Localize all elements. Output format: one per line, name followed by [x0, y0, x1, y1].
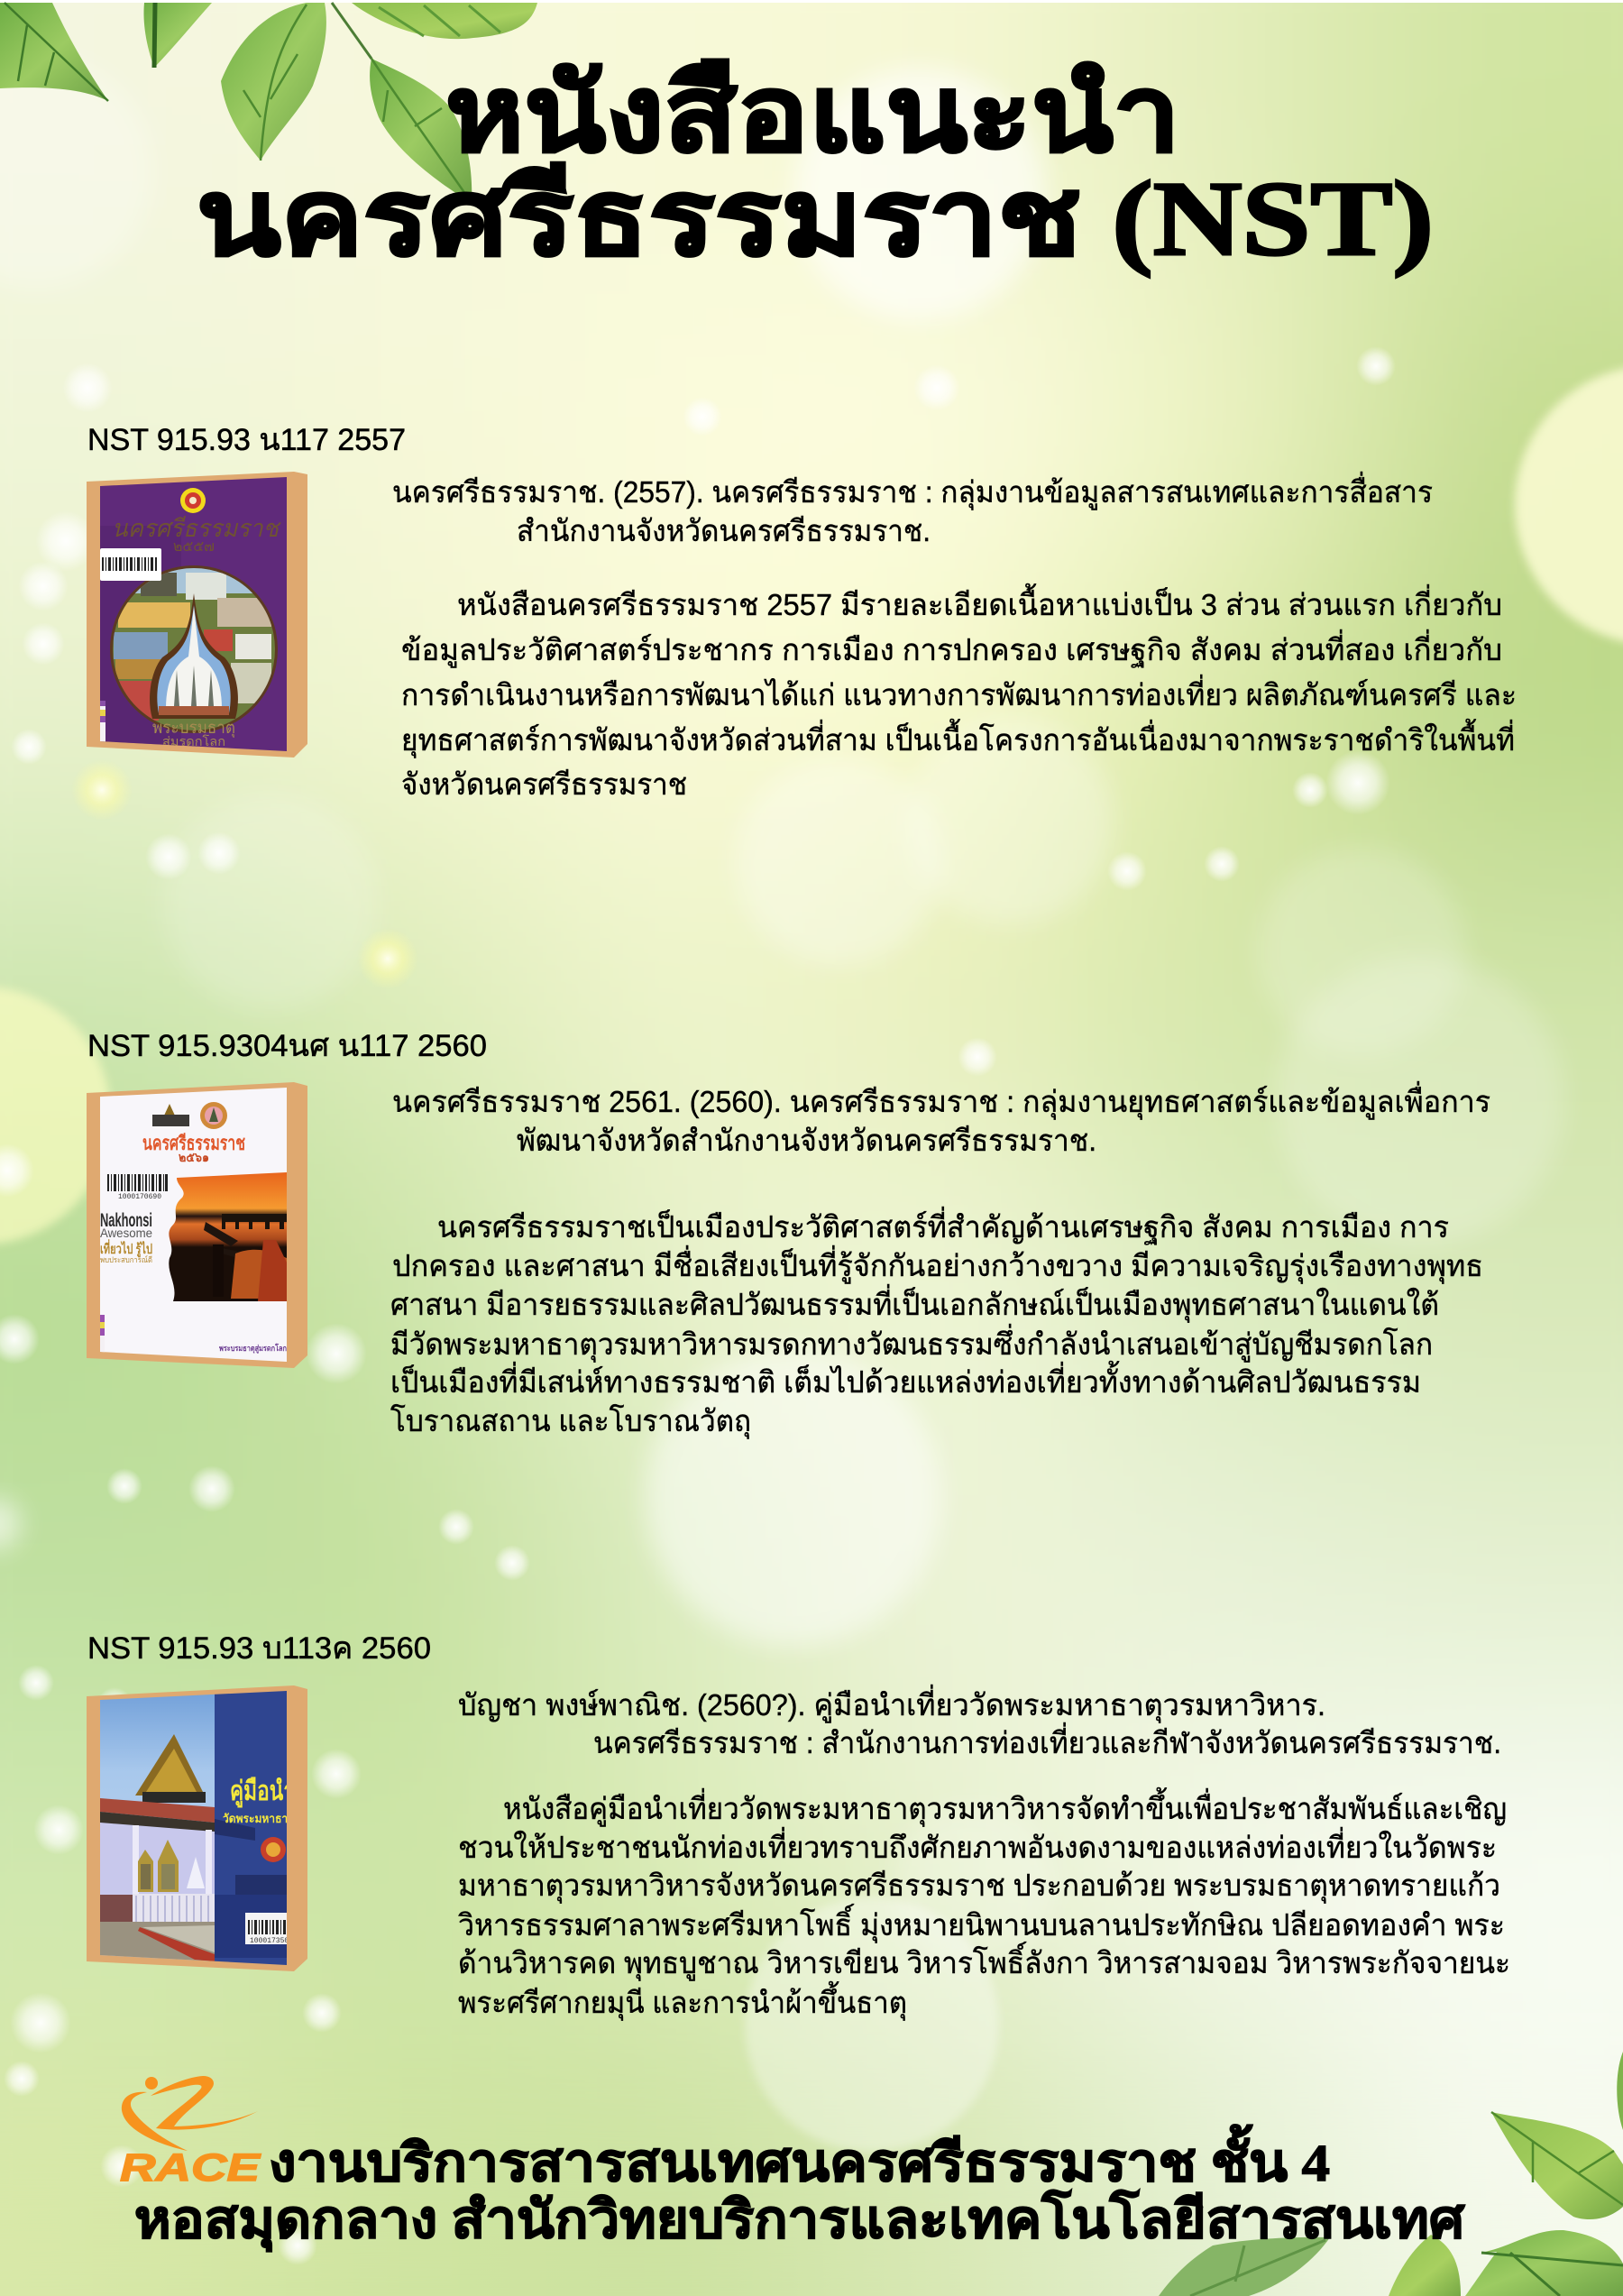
- summary paragraph 2: [390, 1207, 1483, 1439]
- RACE logo: RACE: [120, 2146, 261, 2190]
- bibliographic entry 3: [458, 1685, 1501, 1759]
- bibliographic entry 2: นครศรีธรรมราช 2561. (2560). นครศรีธรรมราช : กลุ่มงานยุทธศาสตร์และข้อมูลเพื่อการ: [392, 1081, 1490, 1120]
- call number 1: NST 915.93 น117 2557: [87, 423, 406, 457]
- Nakhonsi Awesome text: เที่ยวไป รู้ไป: [100, 1239, 152, 1258]
- bibliographic entry 2: [392, 1081, 1490, 1157]
- blue panel: คู่มือนำ: [230, 1777, 295, 1808]
- summary paragraph 1: การดำเนินงานหรือการพัฒนาได้แก่ แนวทางการพัฒนาการท่องเที่ยว ผลิตภัณฑ์นครศรี และ: [401, 675, 1517, 712]
- barcode: 1000170690: [118, 1193, 161, 1201]
- Nakhonsi Awesome text: พบประสบการณ์ดี: [100, 1254, 152, 1264]
- summary paragraph 1: ข้อมูลประวัติศาสตร์ประชากร การเมือง การปกครอง เศรษฐกิจ สังคม ส่วนที่สอง เกี่ยวกับ: [401, 629, 1502, 668]
- decorative top white strip: [0, 0, 1623, 3]
- summary paragraph 3: วิหารธรรมศาลาพระศรีมหาโพธิ์ มุ่งหมายนิพานบนลานประทักษิณ ปลียอดทองคำ พระ: [458, 1904, 1505, 1943]
- bibliographic entry 3: นครศรีธรรมราช : สำนักงานการท่องเที่ยวและกีฬาจังหวัดนครศรีธรรมราช.: [593, 1722, 1501, 1759]
- cover footer text: พระบรมธาตุ: [152, 719, 235, 739]
- temple photo: [100, 1685, 215, 1974]
- summary paragraph 3: [458, 1787, 1510, 2021]
- cover footer text: พระบรมธาตุสู่มรดกโลก: [219, 1343, 287, 1354]
- cover title: นครศรีธรรมราช: [112, 515, 281, 542]
- summary paragraph 1: หนังสือนครศรีธรรมราช 2557 มีรายละเอียดเนื้อหาแบ่งเป็น 3 ส่วน ส่วนแรก เกี่ยวกับ: [457, 583, 1502, 621]
- barcode sticker: [100, 548, 161, 581]
- leaves: top left cluster: [0, 3, 537, 203]
- barcode: [107, 1174, 168, 1201]
- book cover 1: ๒๕๕๗: [173, 539, 215, 555]
- bibliographic entry 3: บัญชา พงษ์พาณิช. (2560?). คู่มือนำเที่ยววัดพระมหาธาตุวรมหาวิหาร.: [458, 1685, 1325, 1723]
- book cover 2: ๒๕๖๑: [179, 1150, 209, 1164]
- RACE logo: [120, 2076, 261, 2190]
- blue panel: [215, 1685, 295, 1974]
- publisher logo: [152, 1104, 189, 1126]
- bibliographic entry 1: [392, 472, 1433, 547]
- title: [197, 56, 1434, 278]
- leaves: bottom right cluster: [1159, 2052, 1623, 2296]
- title: หนังสือแนะนำ: [445, 56, 1180, 174]
- barcode sticker: [245, 1913, 290, 1945]
- summary paragraph 3: มหาธาตุวรมหาวิหารจังหวัดนครศรีธรรมราช ประกอบด้วย พระบรมธาตุหาดทรายแก้ว: [458, 1869, 1500, 1904]
- summary paragraph 2: นครศรีธรรมราชเป็นเมืองประวัติศาสตร์ที่สำคัญด้านเศรษฐกิจ สังคม การเมือง การ: [437, 1207, 1449, 1245]
- summary paragraph 2: มีวัดพระมหาธาตุวรมหาวิหารมรดกทางวัฒนธรรมซึ่งกำลังนำเสนอเข้าสู่บัญชีมรดกโลก: [390, 1324, 1433, 1363]
- bibliographic entry 2: พัฒนาจังหวัดสำนักงานจังหวัดนครศรีธรรมราช.: [517, 1124, 1096, 1157]
- Nakhonsi Awesome text: Awesome: [100, 1226, 152, 1240]
- footer text: [134, 2125, 1465, 2253]
- summary paragraph 3: ด้านวิหารคด พุทธบูชาณ วิหารเขียน วิหารโพธิ์ลังกา วิหารสามจอม วิหารพระกัจจายนะ: [458, 1942, 1510, 1981]
- summary paragraph 2: เป็นเมืองที่มีเสน่ห์ทางธรรมชาติ เต็มไปด้วยแหล่งท่องเที่ยวทั้งทางด้านศิลปวัฒนธรรม: [390, 1361, 1421, 1399]
- summary paragraph 2: โบราณสถาน และโบราณวัตถุ: [390, 1404, 751, 1439]
- Nakhonsi Awesome text: Nakhonsi: [100, 1210, 152, 1231]
- bibliographic entry 1: สำนักงานจังหวัดนครศรีธรรมราช.: [517, 514, 931, 547]
- background: small bokeh dots: [0, 346, 1396, 2265]
- colour strip: [100, 701, 105, 742]
- footer text: งานบริการสารสนเทศนครศรีธรรมราช ชั้น 4: [269, 2125, 1330, 2192]
- sunset photo: [169, 1172, 287, 1301]
- cover title: นครศรีธรรมราช: [142, 1132, 245, 1154]
- Nakhonsi Awesome text: [100, 1210, 152, 1264]
- background: crisp bokeh circles: [0, 365, 1623, 2152]
- summary paragraph 1: จังหวัดนครศรีธรรมราช: [401, 767, 687, 801]
- blue panel: วัดพระมหาธาตุ: [223, 1812, 295, 1826]
- barcode sticker: 100017350: [250, 1937, 289, 1945]
- footer text: หอสมุดกลาง สำนักวิทยบริการและเทคโนโลยีสารสนเทศ: [134, 2188, 1465, 2253]
- summary paragraph 3: พระศรีศากยมุนี และการนำผ้าขึ้นธาตุ: [458, 1981, 907, 2021]
- call number 3: NST 915.93 บ113ค 2560: [87, 1631, 431, 1666]
- book cover 2: [87, 1082, 307, 1371]
- summary paragraph 2: ปกครอง และศาสนา มีชื่อเสียงเป็นที่รู้จักกันอย่างกว้างขวาง มีความเจริญรุ่งเรืองทางพุทธ: [392, 1245, 1483, 1284]
- circular photo collage: [109, 562, 280, 733]
- summary paragraph 1: [401, 583, 1517, 801]
- call number 2: NST 915.9304นศ น117 2560: [87, 1029, 487, 1063]
- background: bottom base colour: [0, 1713, 1623, 2296]
- bibliographic entry 1: นครศรีธรรมราช. (2557). นครศรีธรรมราช : กลุ่มงานข้อมูลสารสนเทศและการสื่อสาร: [392, 472, 1433, 510]
- provincial seal: [200, 1102, 227, 1129]
- cover emblem: [180, 488, 206, 513]
- book cover 1: [87, 472, 307, 758]
- summary paragraph 3: หนังสือคู่มือนำเที่ยววัดพระมหาธาตุวรมหาวิหารจัดทำขึ้นเพื่อประชาสัมพันธ์และเชิญ: [503, 1787, 1507, 1827]
- book cover 3: [87, 1685, 307, 1974]
- summary paragraph 2: ศาสนา มีอารยธรรมและศิลปวัฒนธรรมที่เป็นเอกลักษณ์เป็นเมืองพุทธศาสนาในแดนใต้: [390, 1284, 1439, 1323]
- colour strip: [100, 1315, 105, 1353]
- book cover 1: สู่มรดกโลก: [162, 734, 225, 749]
- summary paragraph 3: ชวนให้ประชาชนนักท่องเที่ยวทราบถึงศักยภาพอันงดงามของแหล่งท่องเที่ยวในวัดพระ: [458, 1827, 1497, 1864]
- summary paragraph 1: ยุทธศาสตร์การพัฒนาจังหวัดส่วนที่สาม เป็นเนื้อโครงการอันเนื่องมาจากพระราชดำริในพื้นที่: [401, 719, 1515, 758]
- title: นครศรีธรรมราช (NST): [197, 160, 1434, 278]
